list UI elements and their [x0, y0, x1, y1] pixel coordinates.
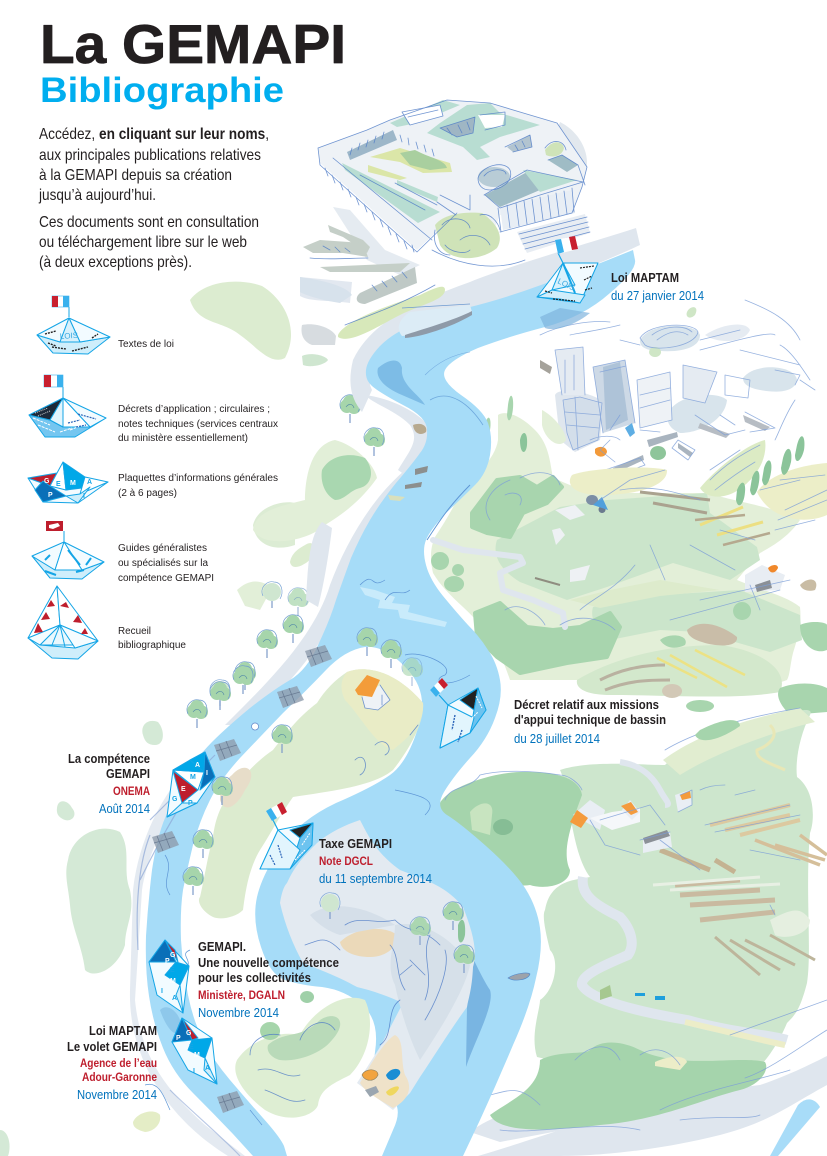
boat: Loi MAPTAM volet GEMAPI: I: [193, 1068, 195, 1075]
legend: bibliographic collection: Recueil: [118, 626, 151, 637]
legend: decrees and circulars: notes techniques (services centraux: [118, 419, 278, 430]
island with house: [183, 628, 423, 918]
boat: La compétence GEMAPI: I: [206, 770, 208, 777]
label: Loi MAPTAM: [611, 271, 704, 303]
legend: bibliographic collection: bibliographique: [118, 640, 186, 651]
title: La GEMAPI: [40, 13, 346, 75]
boat: Loi MAPTAM volet GEMAPI: A: [205, 1065, 210, 1072]
legend: law texts: [37, 296, 174, 354]
legend: decrees and circulars: Décrets d’application ; circulaires ;: [118, 404, 270, 415]
boat: GEMAPI nouvelle compétence: P: [165, 958, 170, 965]
legend: general information leaflets: G: [44, 478, 50, 485]
legend: guides: compétence GEMAPI: [118, 573, 214, 584]
label: La compétence GEMAPI: GEMAPI: [106, 767, 150, 781]
legend: decrees and circulars: [29, 375, 278, 444]
boat: GEMAPI nouvelle compétence: [149, 940, 189, 1013]
legend: guides: ou spécialisés sur la: [118, 558, 208, 569]
intro text: Ces documents sont en consultation: [39, 214, 259, 231]
boat: Loi MAPTAM volet GEMAPI: P: [176, 1035, 181, 1042]
legend: general information leaflets: (2 à 6 pages): [118, 488, 177, 499]
boat: La compétence GEMAPI: A: [195, 762, 200, 769]
intro text: ou téléchargement libre sur le web: [39, 234, 247, 251]
label: GEMAPI nouvelle compétence: Novembre 2014: [198, 1006, 279, 1020]
boat: La compétence GEMAPI: G: [172, 796, 178, 803]
boat: Loi MAPTAM volet GEMAPI: M: [194, 1052, 200, 1059]
scenery: lower right farmland: [439, 708, 827, 1156]
scenery: left bank vegetation: [0, 282, 385, 1156]
scenery: city and stadium: [540, 300, 815, 478]
legend: law texts: Textes de loi: [118, 339, 174, 350]
legend: general information leaflets: P: [48, 492, 53, 499]
intro text: aux principales publications relatives: [39, 147, 261, 164]
boat: La compétence GEMAPI: P: [188, 800, 193, 807]
scenery: moored barges near parliament: [300, 225, 445, 366]
label: La compétence GEMAPI: [68, 752, 150, 816]
legend: decrees and circulars: du ministère essentiellement): [118, 433, 248, 444]
boat: Loi MAPTAM volet GEMAPI: [172, 1018, 217, 1084]
legend: general information leaflets: A: [87, 479, 92, 486]
label: Loi MAPTAM volet GEMAPI: Adour-Garonne: [82, 1070, 157, 1084]
label: La compétence GEMAPI: ONEMA: [113, 784, 150, 798]
scenery: parliament building: [318, 100, 590, 266]
label: Loi MAPTAM: du 27 janvier 2014: [611, 289, 704, 303]
boat: La compétence GEMAPI: E: [181, 786, 186, 793]
subtitle: Bibliographie: [40, 71, 284, 110]
boat: La compétence GEMAPI: M: [190, 774, 196, 781]
legend: general information leaflets: Plaquettes d’informations générales: [118, 473, 278, 484]
label: Décret bassin: du 28 juillet 2014: [514, 732, 600, 746]
boat: Loi MAPTAM volet GEMAPI: E: [189, 1044, 194, 1051]
boat: GEMAPI nouvelle compétence: G: [170, 952, 176, 959]
boat: GEMAPI nouvelle compétence: E: [170, 967, 175, 974]
intro text: jusqu’à aujourd’hui.: [38, 187, 156, 204]
boat: GEMAPI nouvelle compétence: M: [170, 978, 176, 985]
small island near lower channel: [235, 991, 370, 1118]
river: [146, 250, 635, 1156]
intro text: [38, 126, 269, 271]
label: Taxe GEMAPI: [319, 837, 432, 886]
scenery: pastures and vineyards on the right bank: [431, 396, 827, 715]
boat: La compétence GEMAPI: [167, 752, 215, 817]
label: GEMAPI nouvelle compétence: [198, 940, 339, 1020]
legend: guides: [32, 521, 214, 584]
label: Loi MAPTAM volet GEMAPI: Agence de l’eau: [80, 1056, 157, 1070]
label: Loi MAPTAM volet GEMAPI: Loi MAPTAM: [89, 1024, 157, 1038]
lower peninsula with beach: [280, 820, 475, 1110]
boat: GEMAPI nouvelle compétence: I: [161, 988, 163, 995]
boat: Loi MAPTAM volet GEMAPI: G: [186, 1030, 192, 1037]
legend: general information leaflets: M: [70, 480, 76, 487]
label: Taxe GEMAPI: Taxe GEMAPI: [319, 837, 392, 851]
legend: general information leaflets: [28, 462, 278, 503]
label: GEMAPI nouvelle compétence: Ministère, DGALN: [198, 988, 285, 1002]
boat: GEMAPI nouvelle compétence: A: [172, 995, 177, 1002]
label: Loi MAPTAM: Loi MAPTAM: [611, 271, 679, 285]
intro text: (à deux exceptions près).: [39, 254, 192, 271]
legend: law texts: LOIS: [60, 331, 78, 341]
label: GEMAPI nouvelle compétence: GEMAPI.: [198, 940, 246, 954]
label: Taxe GEMAPI: du 11 septembre 2014: [319, 872, 432, 886]
label: GEMAPI nouvelle compétence: Une nouvelle compétence: [198, 956, 339, 970]
legend: guides: Guides généralistes: [118, 543, 207, 554]
label: GEMAPI nouvelle compétence: pour les collectivités: [198, 971, 311, 985]
label: Taxe GEMAPI: Note DGCL: [319, 854, 373, 868]
boat: Loi MAPTAM: LOIS: [556, 277, 576, 293]
boat: Décret bassin: [430, 678, 486, 748]
river details: shadows, reflections and boats: [137, 304, 590, 1156]
boat: Taxe GEMAPI: [260, 802, 313, 869]
legend: general information leaflets: E: [56, 481, 61, 488]
label: Décret bassin: [514, 698, 666, 746]
intro text: Accédez, en cliquant sur leur noms,: [39, 126, 269, 143]
intro text: à la GEMAPI depuis sa création: [39, 167, 232, 184]
label: La compétence GEMAPI: Août 2014: [99, 802, 150, 816]
label: Décret bassin: Décret relatif aux missions: [514, 698, 659, 712]
legend: bibliographic collection: [28, 586, 186, 659]
boat: Loi MAPTAM: [537, 236, 598, 303]
label: Loi MAPTAM volet GEMAPI: Novembre 2014: [77, 1088, 157, 1102]
legend: general information leaflets: I: [83, 493, 85, 500]
label: Décret bassin: d'appui technique de bassin: [514, 713, 666, 727]
scenery: grey embankments: [130, 207, 827, 1156]
label: Loi MAPTAM volet GEMAPI: Le volet GEMAPI: [67, 1040, 157, 1054]
label: Loi MAPTAM volet GEMAPI: [67, 1024, 157, 1102]
label: La compétence GEMAPI: La compétence: [68, 752, 150, 766]
